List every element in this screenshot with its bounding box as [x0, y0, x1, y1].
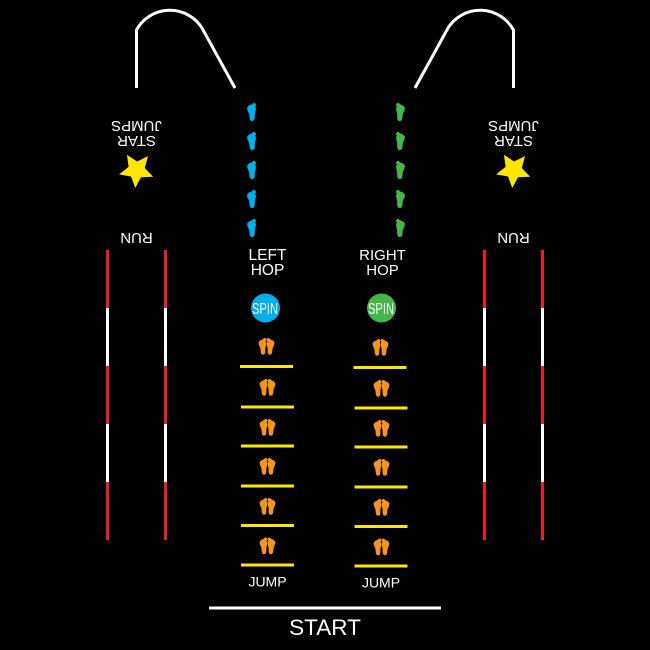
right jump lane orange feet: [372, 339, 390, 555]
blue spin circle: SPIN: [252, 301, 278, 318]
left running lane poles: [106, 250, 167, 540]
start line: [209, 606, 441, 610]
green right-foot hop prints: [396, 103, 405, 237]
left jump lane yellow lines: [240, 365, 294, 566]
left star jumps label: JUMPS: [111, 117, 162, 134]
left run label: RUN: [120, 229, 153, 246]
blue spin circle: [251, 294, 280, 322]
right hop label: [359, 247, 406, 279]
start label: START: [289, 615, 361, 640]
left hop label: HOP: [251, 262, 284, 279]
green spin circle: SPIN: [368, 301, 394, 318]
left hop label: LEFT: [249, 247, 287, 264]
right jump lane yellow lines: [354, 366, 408, 568]
right hop label: HOP: [366, 262, 399, 279]
right jump label: JUMP: [362, 574, 400, 590]
right run label: RUN: [497, 229, 530, 246]
left curved path: [136, 10, 235, 88]
left jump label: JUMP: [248, 574, 287, 590]
green spin circle: [367, 294, 396, 322]
right star jumps label: [488, 117, 539, 149]
left star jumps label: [111, 117, 162, 149]
left jump lane orange feet: [258, 338, 276, 554]
left star jumps label: STAR: [117, 132, 156, 149]
right star jumps label: STAR: [494, 132, 533, 149]
right hop label: RIGHT: [359, 247, 406, 264]
left hop label: [249, 247, 287, 279]
right running lane poles: [483, 250, 544, 540]
right star jumps label: JUMPS: [488, 117, 539, 134]
icon: right yellow star: [495, 154, 532, 189]
right curved path: [415, 10, 514, 88]
blue left-foot hop prints: [247, 103, 256, 237]
icon: left yellow star: [118, 154, 155, 189]
